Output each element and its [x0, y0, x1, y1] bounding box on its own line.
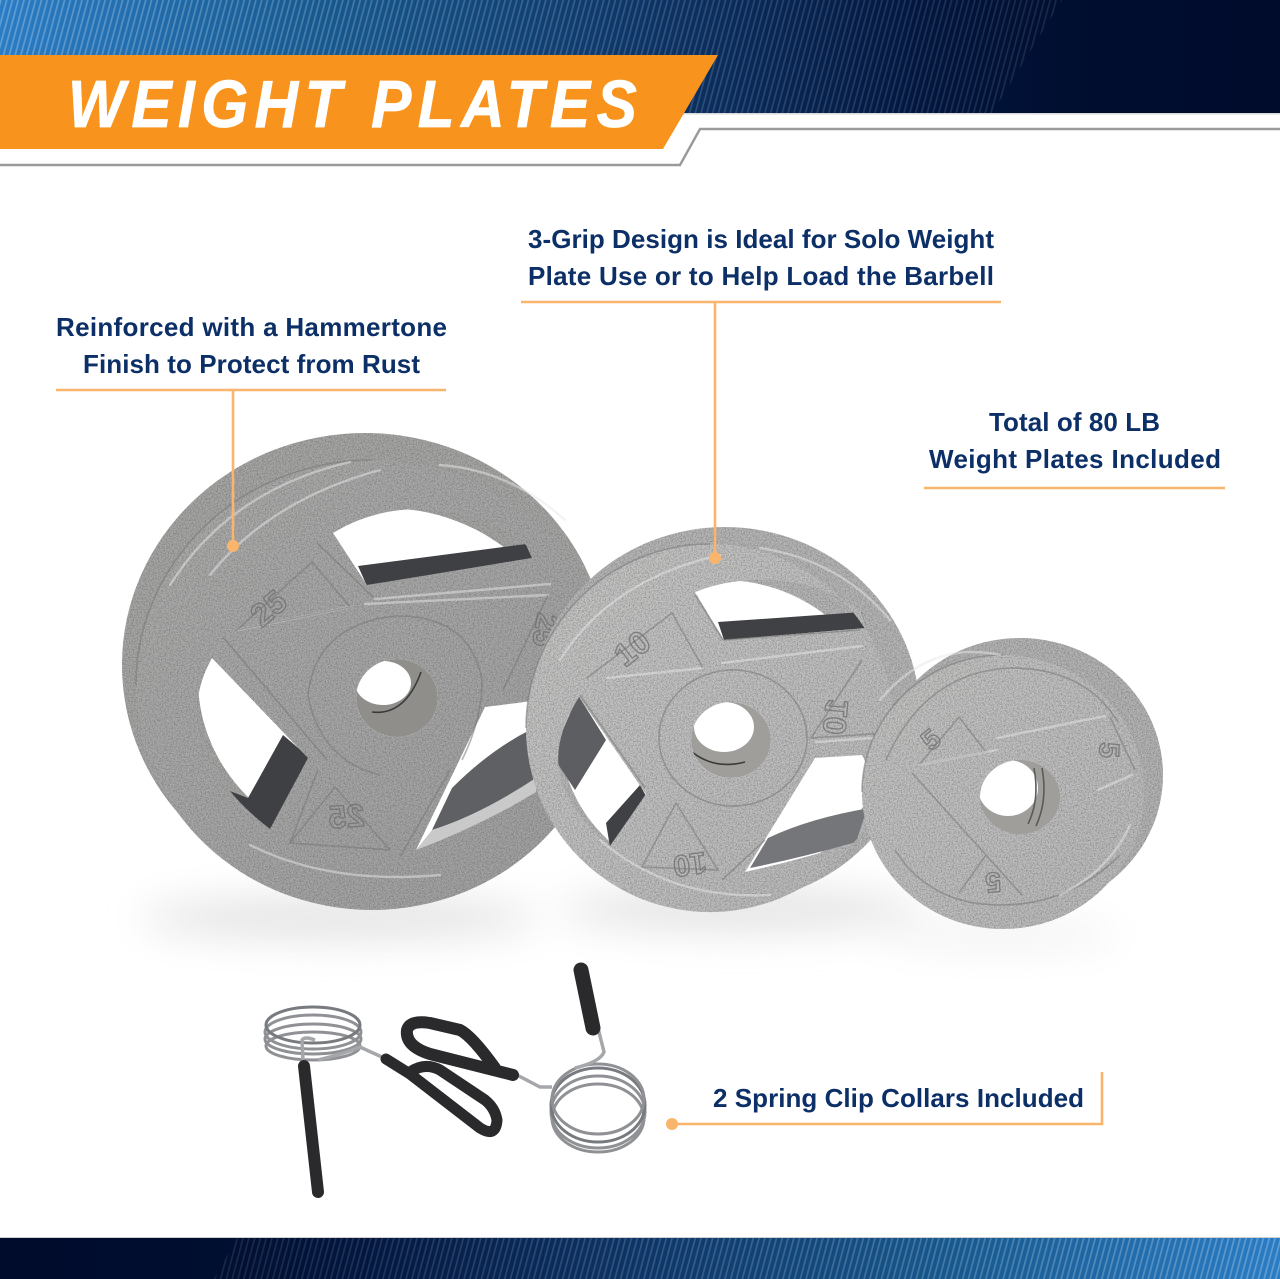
callout: total weight	[924, 407, 1225, 488]
hub boss and spokes detail	[526, 544, 890, 895]
small 5 LB plates	[862, 638, 1163, 929]
plate weight marks: 10	[607, 623, 657, 674]
grip loop	[386, 1059, 497, 1132]
hub boss and spokes detail: 25	[327, 797, 365, 835]
back plate	[122, 433, 608, 897]
inner lip and spoke detail: 5	[1093, 742, 1125, 758]
hub boss and spokes detail: 10	[671, 845, 709, 882]
coil	[551, 1064, 645, 1152]
callout: 3-grip design: Plate Use or to Help Load the Barbell	[528, 261, 994, 291]
header band	[0, 0, 1280, 114]
callout: 3-grip design	[521, 224, 1001, 564]
inner lip and spoke detail	[862, 652, 1135, 905]
handle	[581, 970, 593, 1028]
title banner	[0, 55, 1280, 165]
front plate with three grip windows and bore	[136, 460, 608, 910]
inner lip and spoke detail: 5	[984, 866, 1003, 898]
front plate with bore	[862, 655, 1144, 929]
callout: spring clip collars	[666, 1072, 1102, 1130]
right spring clip collar	[407, 970, 645, 1152]
dark back plate metal seen through windows	[222, 544, 536, 850]
centre bore	[691, 702, 771, 778]
footer band	[0, 1237, 1280, 1279]
dark back plate metal	[552, 612, 870, 868]
centre bore	[355, 659, 438, 737]
grip loop	[407, 1022, 513, 1075]
hub boss and spokes detail: 10	[816, 697, 855, 736]
callout: total weight: Total of 80 LB	[989, 407, 1160, 437]
callout: hammertone finish: Finish to Protect from Rust	[83, 349, 420, 379]
plate weight marks: 25	[243, 583, 294, 633]
centre bore	[978, 760, 1060, 834]
callout: 3-grip design: 3-Grip Design is Ideal for Solo Weight	[528, 224, 994, 254]
medium 10 LB plates	[526, 527, 920, 912]
front plate with windows and bore	[526, 544, 894, 912]
handle	[304, 1066, 318, 1192]
callout: spring clip collars: 2 Spring Clip Collars Included	[713, 1083, 1084, 1113]
back plate	[530, 527, 920, 903]
floor shadows	[140, 890, 1120, 945]
large 25 LB plates	[122, 433, 608, 910]
back plate	[877, 638, 1163, 912]
coil	[265, 1007, 361, 1060]
callout: total weight: Weight Plates Included	[929, 444, 1221, 474]
title: WEIGHT PLATES	[68, 66, 637, 142]
callout: hammertone finish	[56, 312, 447, 552]
plate weight marks: 5	[915, 723, 947, 757]
hub boss and spokes detail: 25	[525, 611, 564, 649]
callout: hammertone finish: Reinforced with a Hammertone	[56, 312, 447, 342]
hub boss and spokes detail	[136, 460, 565, 877]
left spring clip collar	[265, 1007, 497, 1192]
